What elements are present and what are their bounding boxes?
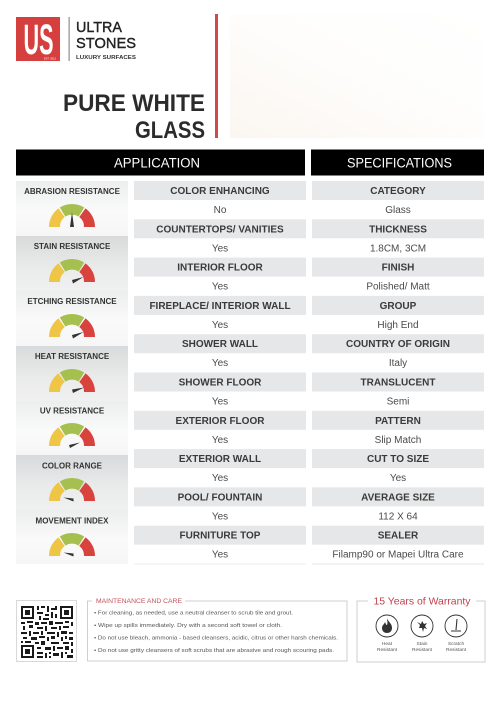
icon: scratch resistant	[445, 615, 467, 653]
gauge: stain resistance: STAIN RESISTANCE	[34, 242, 111, 251]
header: application: APPLICATION	[114, 156, 200, 170]
table: specifications: Slip Match	[375, 435, 421, 446]
table: specifications: GROUP	[380, 301, 417, 312]
table: specifications: PATTERN	[375, 416, 421, 427]
gauge: heat resistance: HEAT RESISTANCE	[35, 352, 110, 361]
table: application: SHOWER FLOOR	[179, 378, 262, 388]
logo wordmark	[76, 19, 136, 61]
logo wordmark: LUXURY SURFACES	[76, 55, 136, 61]
table: application: FIREPLACE/ INTERIOR WALL	[149, 301, 291, 312]
header: specifications: SPECIFICATIONS	[347, 156, 452, 170]
gauge: abrasion resistance: ABRASION RESISTANCE	[24, 187, 121, 196]
table: specifications: CATEGORY	[370, 186, 426, 197]
header: application	[16, 150, 305, 176]
gauge: uv resistance: UV RESISTANCE	[40, 406, 105, 416]
gauge: heat resistance	[16, 346, 128, 401]
table: specifications: Polished/ Matt	[366, 282, 430, 293]
icon: scratch resistant: Scratch	[448, 641, 464, 647]
panel: maintenance and care	[88, 598, 347, 661]
heading: maintenance and care: MAINTENANCE AND CARE	[96, 598, 182, 605]
logo mark: EST. 2012	[44, 56, 57, 60]
panel: warranty	[357, 596, 485, 662]
care instructions: • Do not use bleach, ammonia - based cleansers, acidic, citrus or other harsh chemicals.	[94, 636, 338, 642]
heading: 15 years of warranty: 15 Years of Warranty	[374, 596, 471, 608]
table: application: COUNTERTOPS/ VANITIES	[156, 224, 284, 235]
table: specifications: THICKNESS	[369, 224, 427, 235]
table: application: COLOR ENHANCING	[170, 186, 270, 197]
table: specifications: AVERAGE SIZE	[361, 492, 435, 503]
care instructions: • Do not use gritty cleansers of soft scrubs that are abrasive and rough scouring pads.	[94, 648, 334, 654]
title: GLASS	[135, 117, 205, 144]
table: specifications: COUNTRY OF ORIGIN	[346, 339, 450, 350]
gauge: movement index: MOVEMENT INDEX	[36, 516, 109, 526]
table: specifications	[312, 181, 484, 564]
table: application: Yes	[212, 435, 228, 446]
care instructions: • For cleaning, as needed, use a neutral cleanser to scrub tile and grout.	[94, 610, 293, 616]
table: specifications: 112 X 64	[378, 511, 418, 522]
table: specifications: TRANSLUCENT	[360, 378, 436, 388]
product image: white glass slab	[230, 14, 484, 138]
table: application: POOL/ FOUNTAIN	[178, 492, 262, 503]
table: application: Yes	[212, 282, 228, 293]
icon: stain resistant: Stain	[417, 641, 428, 647]
table: application: Yes	[212, 320, 228, 331]
accent bar	[215, 14, 218, 138]
gauge: movement index	[16, 510, 128, 564]
gauge: etching resistance: ETCHING RESISTANCE	[27, 297, 117, 306]
qr code	[16, 600, 76, 662]
table: specifications: SEALER	[378, 531, 419, 542]
table: application	[134, 181, 306, 564]
icon: stain resistant: Resistant	[412, 647, 433, 653]
care instructions: • Wipe up spills immediately. Dry with a second soft towel or cloth.	[94, 623, 282, 629]
table: application: EXTERIOR FLOOR	[176, 416, 265, 427]
table: specifications: High End	[377, 320, 419, 331]
gauge: color range: COLOR RANGE	[42, 462, 103, 470]
table: application: Yes	[212, 358, 228, 369]
table: application: EXTERIOR WALL	[179, 454, 261, 465]
table: specifications: CUT TO SIZE	[367, 454, 429, 465]
logo wordmark: STONES	[76, 35, 136, 52]
title: PURE WHITE	[63, 90, 205, 117]
table: application: SHOWER WALL	[182, 339, 258, 350]
table: specifications: Glass	[385, 205, 411, 216]
table: application: Yes	[212, 473, 228, 484]
table: specifications: Filamp90 or Mapei Ultra Care	[332, 550, 464, 561]
table: specifications: FINISH	[382, 263, 414, 274]
table: application: Yes	[212, 550, 228, 561]
table: application: FURNITURE TOP	[180, 531, 261, 542]
table: application: Yes	[212, 243, 228, 254]
title	[63, 90, 205, 144]
logo wordmark: ULTRA	[76, 19, 122, 36]
icon: heat resistant	[376, 615, 398, 653]
table: application: No	[214, 205, 227, 216]
icon: stain resistant	[411, 615, 433, 653]
gauge: etching resistance	[16, 291, 128, 346]
gauge: abrasion resistance	[16, 181, 128, 236]
care instructions	[94, 610, 338, 654]
table: specifications: Italy	[389, 358, 407, 369]
logo mark: US	[24, 16, 54, 64]
gauge: color range	[16, 455, 128, 510]
table: specifications: 1.8CM, 3CM	[370, 243, 426, 254]
gauge: stain resistance	[16, 236, 128, 291]
logo mark	[16, 16, 60, 64]
icon: heat resistant: Heat	[382, 641, 393, 647]
logo: Ultra Stones	[16, 16, 136, 64]
header: specifications	[311, 150, 484, 176]
table: specifications: Semi	[387, 396, 409, 408]
table: application: INTERIOR FLOOR	[177, 263, 264, 274]
icon: scratch resistant: Resistant	[446, 647, 467, 653]
table: application: Yes	[212, 396, 228, 408]
table: application: Yes	[212, 511, 228, 522]
table: specifications: Yes	[390, 473, 406, 484]
icon: heat resistant: Resistant	[377, 647, 398, 653]
panel: resistance gauges	[16, 181, 128, 564]
gauge: uv resistance	[16, 401, 128, 455]
